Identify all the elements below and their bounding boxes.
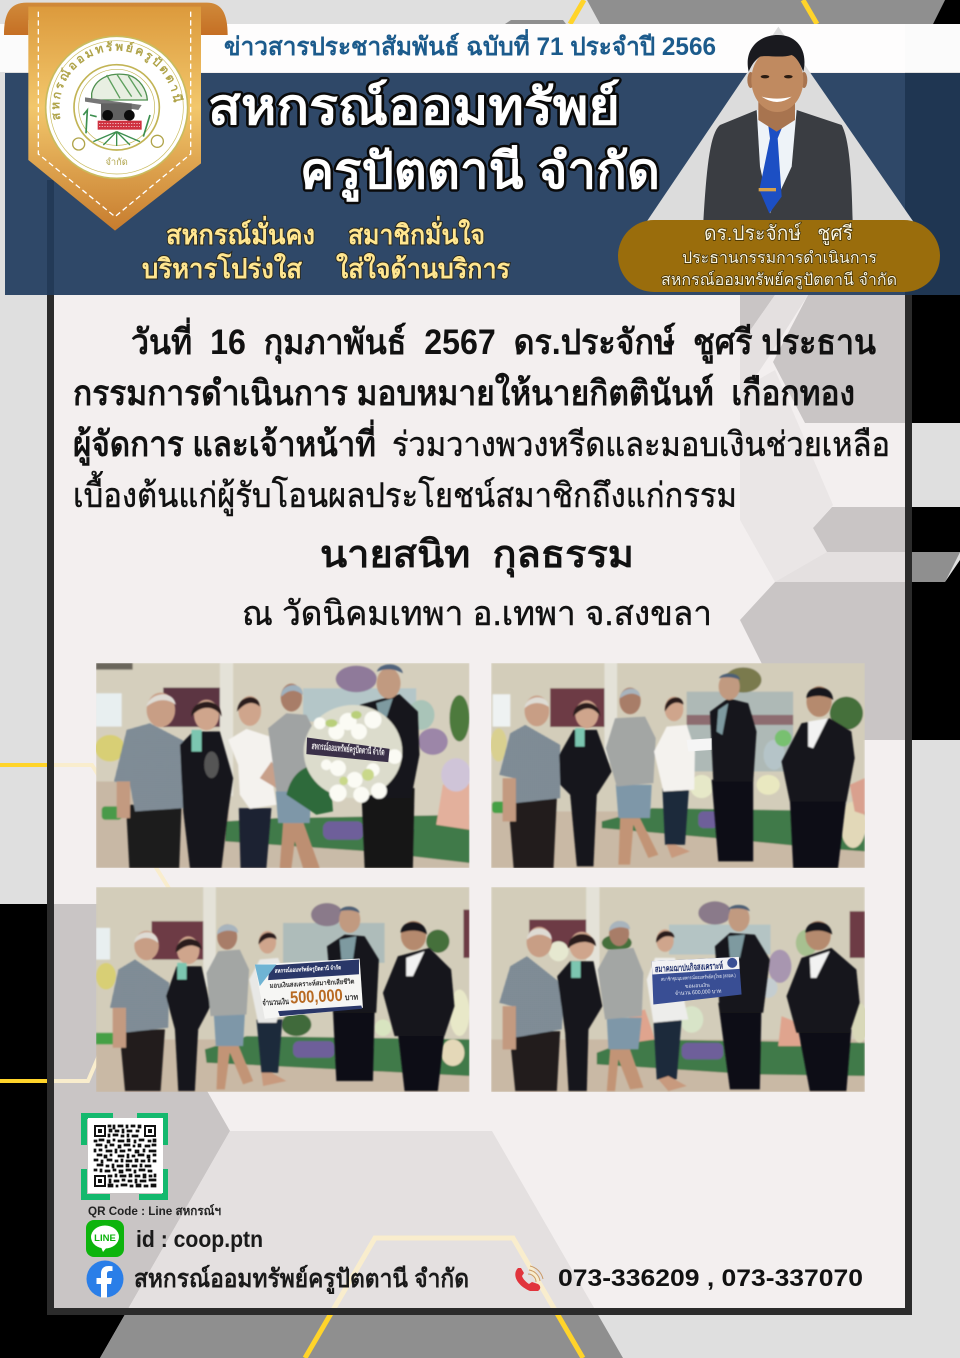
body text block: กรรมการดำเนินการ มอบหมายให้นายกิตตินันท์ เกือกทอง — [73, 372, 855, 413]
slogan: บริหารโปร่งใส — [142, 252, 302, 284]
ribbon stitching — [38, 12, 191, 217]
man in plaid shirt — [499, 927, 565, 1091]
cheque board: บาท — [345, 992, 358, 1002]
cheque board: มอบเงินสงเคราะห์สมาชิกเสียชีวิต — [269, 977, 355, 990]
association board: สมาคมฌาปนกิจสงเคราะห์ — [655, 960, 723, 974]
woman in black — [557, 932, 602, 1091]
man in dark suit — [781, 686, 855, 868]
icon: phone — [515, 1266, 543, 1291]
man in grey shirt — [598, 921, 643, 1091]
hair — [748, 35, 804, 72]
QR code with green frame — [84, 1116, 165, 1197]
photo: presenting wreath — [96, 663, 470, 868]
slogan — [142, 215, 510, 284]
green corner brackets — [84, 1116, 165, 1197]
title: สหกรณ์ออมทรัพย์ — [208, 79, 620, 135]
newsletter heading: ข่าวสารประชาสัมพันธ์ ฉบับที่ 71 ประจำปี 2566 — [224, 29, 716, 61]
slogan: ใส่ใจด้านบริการ — [336, 253, 510, 284]
name plate — [618, 220, 940, 292]
grey triangle backdrop — [647, 27, 913, 222]
man in black suit — [710, 673, 757, 861]
ribbon top roll — [4, 3, 228, 35]
photo: handing envelope — [491, 663, 865, 868]
phone numbers: 073-336209 , 073-337070 — [558, 1265, 863, 1292]
man in grey shirt — [207, 924, 253, 1089]
name plate: ดร.ประจักษ์ ชูศรี — [704, 222, 853, 246]
body text block: เบื้องต้นแก่ผู้รับโอนผลประโยชน์สมาชิกถึงแก่กรรม — [73, 471, 737, 516]
slogan: สมาชิกมั่นใจ — [348, 215, 485, 250]
suit — [703, 110, 853, 222]
icon: LINE — [86, 1220, 124, 1257]
body text block: ร่วมวางพวงหรีดและมอบเงินช่วยเหลือ — [392, 426, 890, 464]
neck and face — [758, 90, 795, 132]
woman in white — [228, 696, 290, 868]
icon: LINE: LINE — [94, 1233, 116, 1244]
association board — [652, 957, 742, 1004]
man in dark suit — [383, 921, 454, 1091]
portrait of chairman — [647, 26, 914, 222]
woman holding board — [647, 929, 688, 1091]
woman in black — [180, 700, 233, 868]
cheque board — [255, 959, 363, 1019]
LINE id: id : coop.ptn — [136, 1226, 263, 1252]
cheque board: 500,000 — [290, 985, 343, 1007]
QR caption: QR Code : Line สหกรณ์ฯ — [88, 1204, 221, 1218]
body text block: วันที่ 16 กุมภาพันธ์ 2567 ดร.ประจักษ์ ชูศรี ประธาน — [131, 317, 876, 364]
man in grey shirt — [268, 684, 320, 868]
Facebook page name: สหกรณ์ออมทรัพย์ครูปัตตานี จำกัด — [134, 1264, 469, 1295]
QR white card — [88, 1118, 163, 1193]
coop seal — [44, 36, 188, 179]
header strip — [0, 24, 960, 72]
coop seal: สหกรณ์ออมทรัพย์ครูปัตตานี — [52, 41, 184, 120]
man in plaid shirt — [499, 696, 560, 868]
photo: association board 600,000 — [491, 887, 865, 1092]
name heading: นายสนิท กุลธรรม — [320, 534, 634, 578]
wreath banner — [306, 738, 390, 762]
logo ribbon — [4, 2, 228, 230]
man in grey shirt — [606, 688, 658, 865]
title: ครูปัตตานี จำกัด — [300, 143, 660, 202]
icon: Facebook — [86, 1260, 124, 1298]
name plate: ประธานกรรมการดำเนินการ — [682, 250, 877, 267]
body text block: ผู้จัดการ และเจ้าหน้าที่ — [73, 419, 376, 466]
woman in black — [166, 936, 211, 1091]
association board: ขอมอบเงิน — [685, 982, 711, 990]
association board: สมาชิกชุมนุมสหกรณ์ออมทรัพย์ครูไทย (สสอค.) — [661, 972, 736, 983]
envelope — [687, 738, 712, 752]
location line: ณ วัดนิคมเทพา อ.เทพา จ.สงขลา — [242, 595, 712, 633]
shirt — [757, 110, 797, 213]
man in plaid shirt — [110, 931, 169, 1091]
cheque board: สหกรณ์ออมทรัพย์ครูปัตตานี จำกัด — [274, 963, 341, 976]
slogan: สหกรณ์มั่นคง — [166, 215, 315, 250]
title — [208, 79, 660, 202]
wreath — [286, 705, 402, 815]
woman in black — [559, 700, 612, 866]
smile — [762, 97, 792, 102]
name plate: สหกรณ์ออมทรัพย์ครูปัตตานี จำกัด — [661, 270, 897, 290]
man in black suit — [360, 664, 420, 868]
association board: จำนวน 600,000 บาท — [675, 988, 722, 997]
QR modules — [94, 1125, 156, 1187]
wreath banner: สหกรณ์ออมทรัพย์ครูปัตตานี จำกัด — [311, 740, 385, 758]
man in plaid shirt — [114, 693, 185, 868]
woman in white — [654, 697, 695, 858]
tie — [759, 126, 783, 213]
coop seal: จำกัด — [105, 157, 128, 167]
ribbon body — [28, 7, 201, 231]
man in black suit — [715, 905, 770, 1089]
woman holding cheque — [249, 931, 286, 1086]
photo: cheque presentation 500,000 — [96, 887, 470, 1092]
man in dark suit — [786, 921, 860, 1091]
cheque board: จำนวนเงิน — [262, 997, 290, 1007]
body text block — [73, 317, 890, 516]
man in black suit — [327, 906, 379, 1081]
navy header band — [5, 73, 960, 295]
